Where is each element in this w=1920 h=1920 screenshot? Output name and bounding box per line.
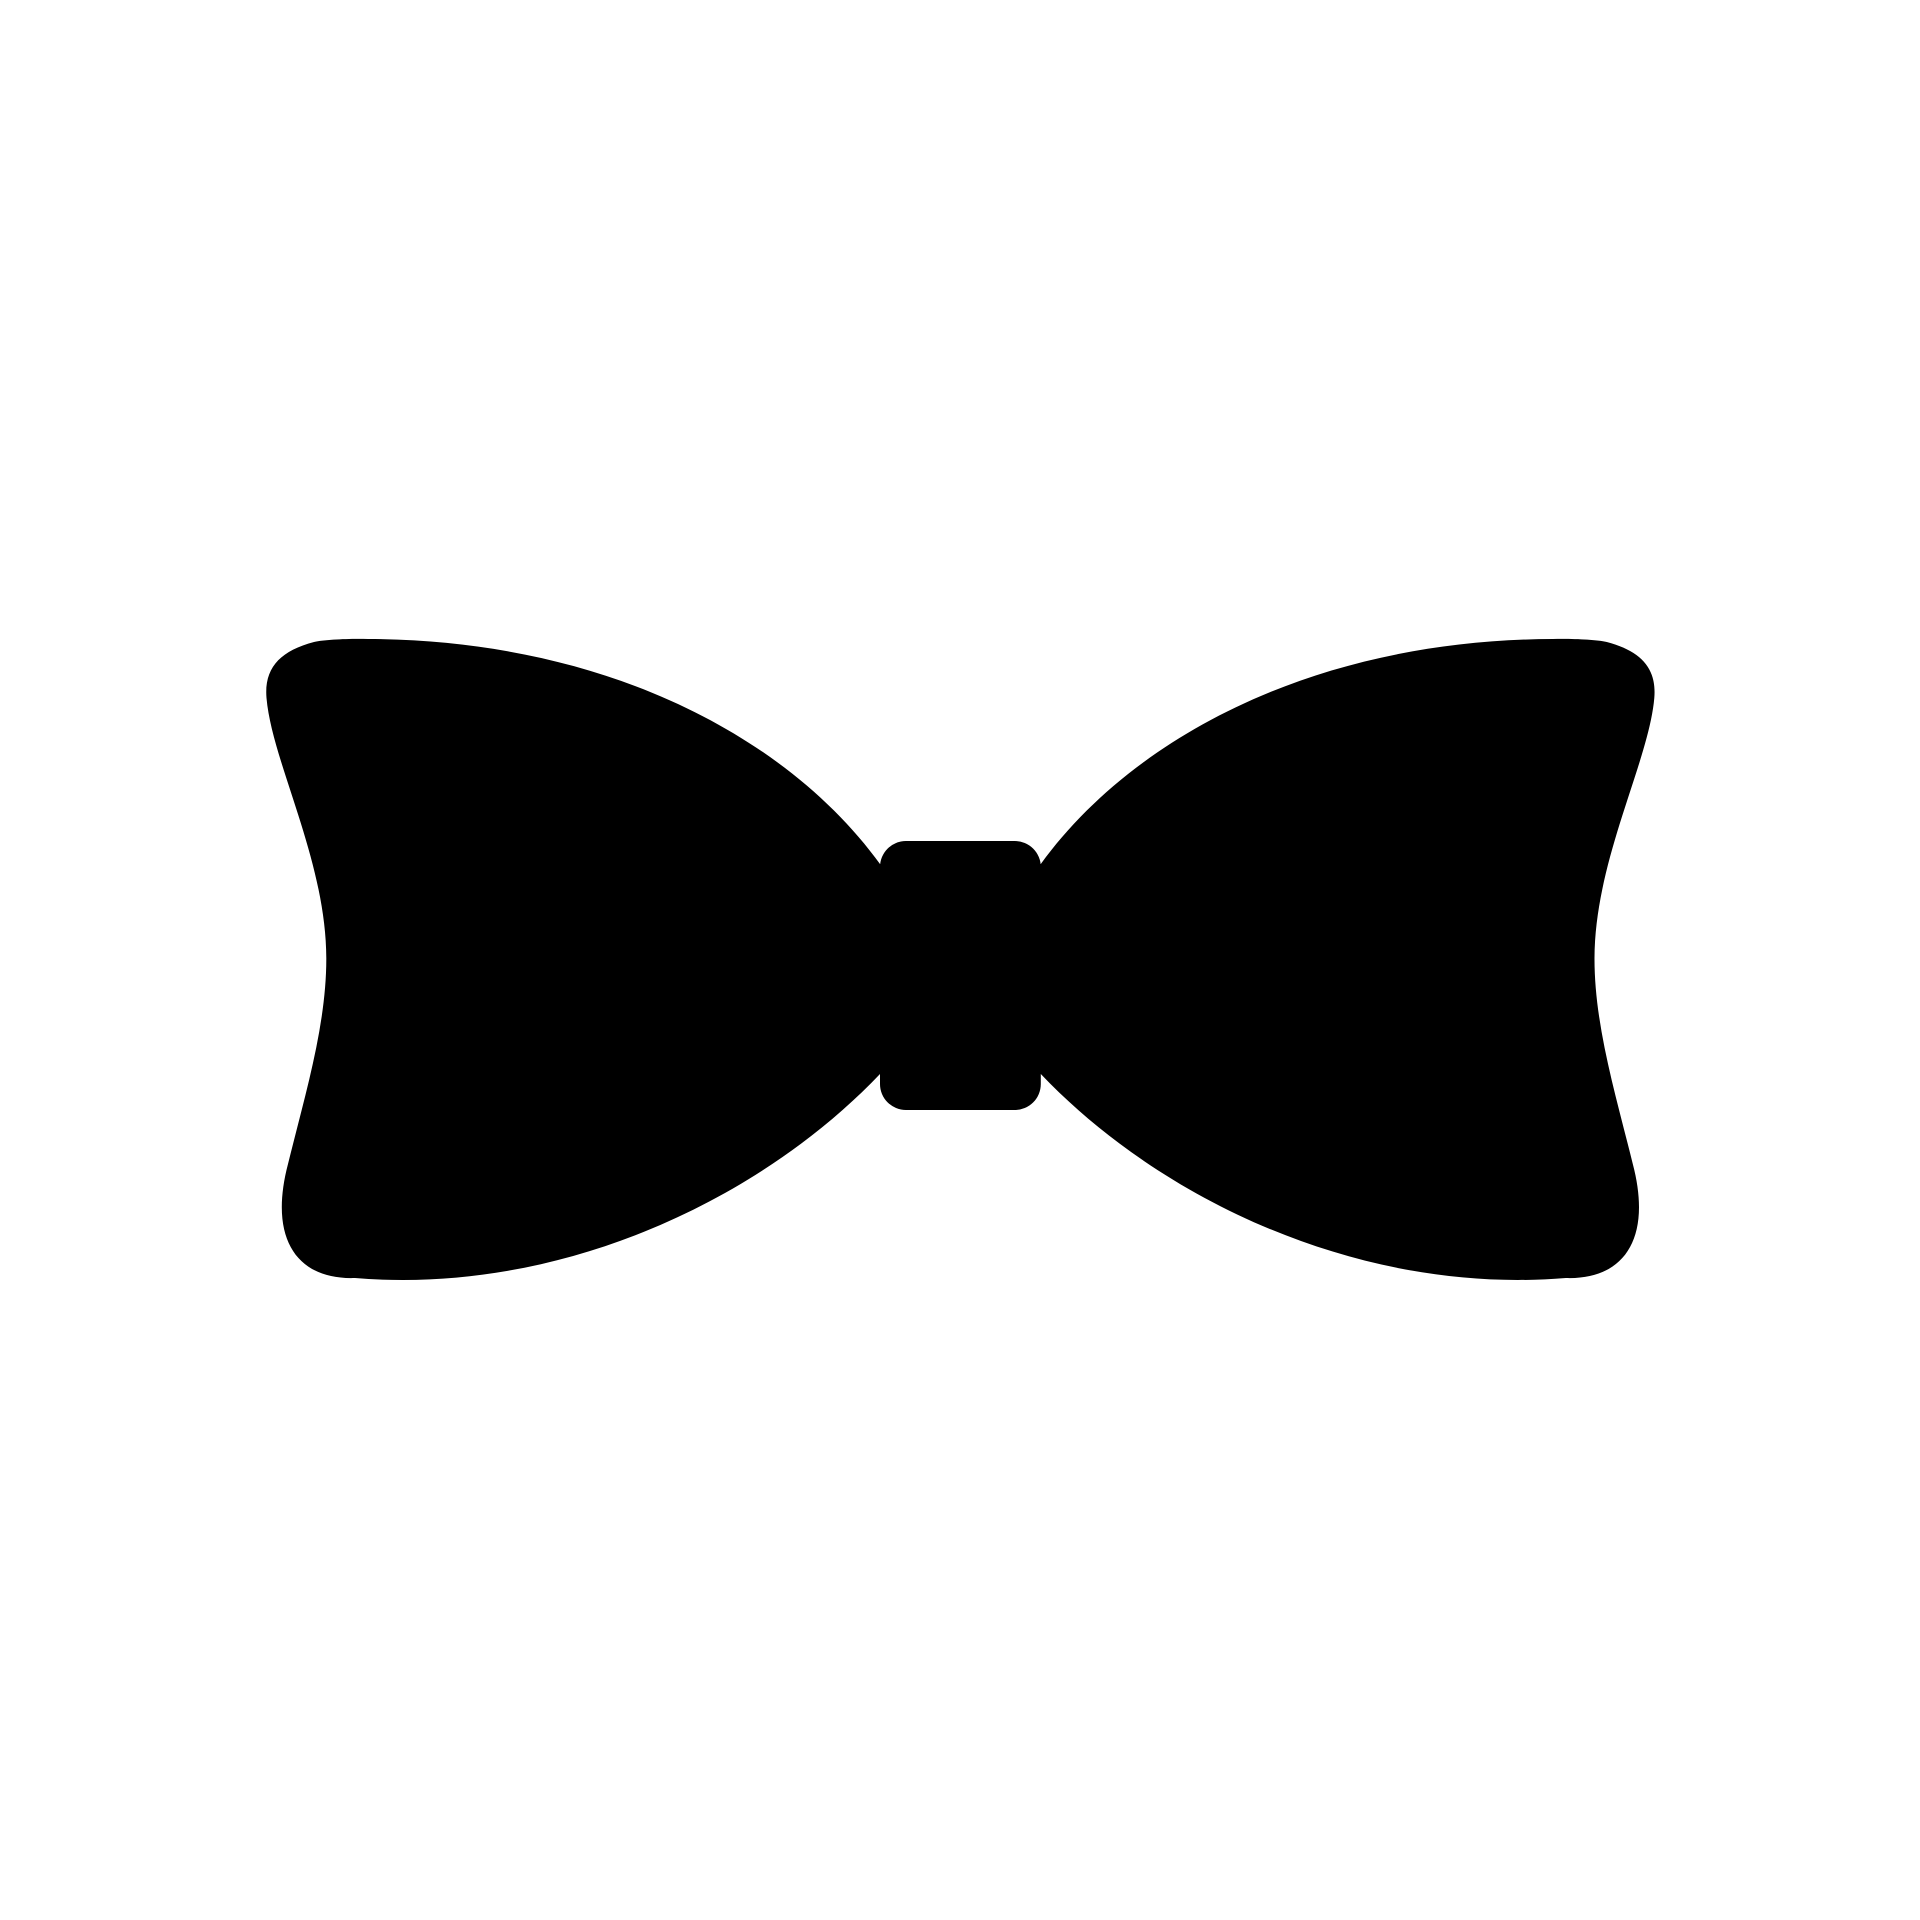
center knot of bow tie bbox=[880, 841, 1041, 1110]
right wing of bow tie bbox=[1021, 639, 1655, 1280]
left wing of bow tie bbox=[266, 639, 900, 1280]
